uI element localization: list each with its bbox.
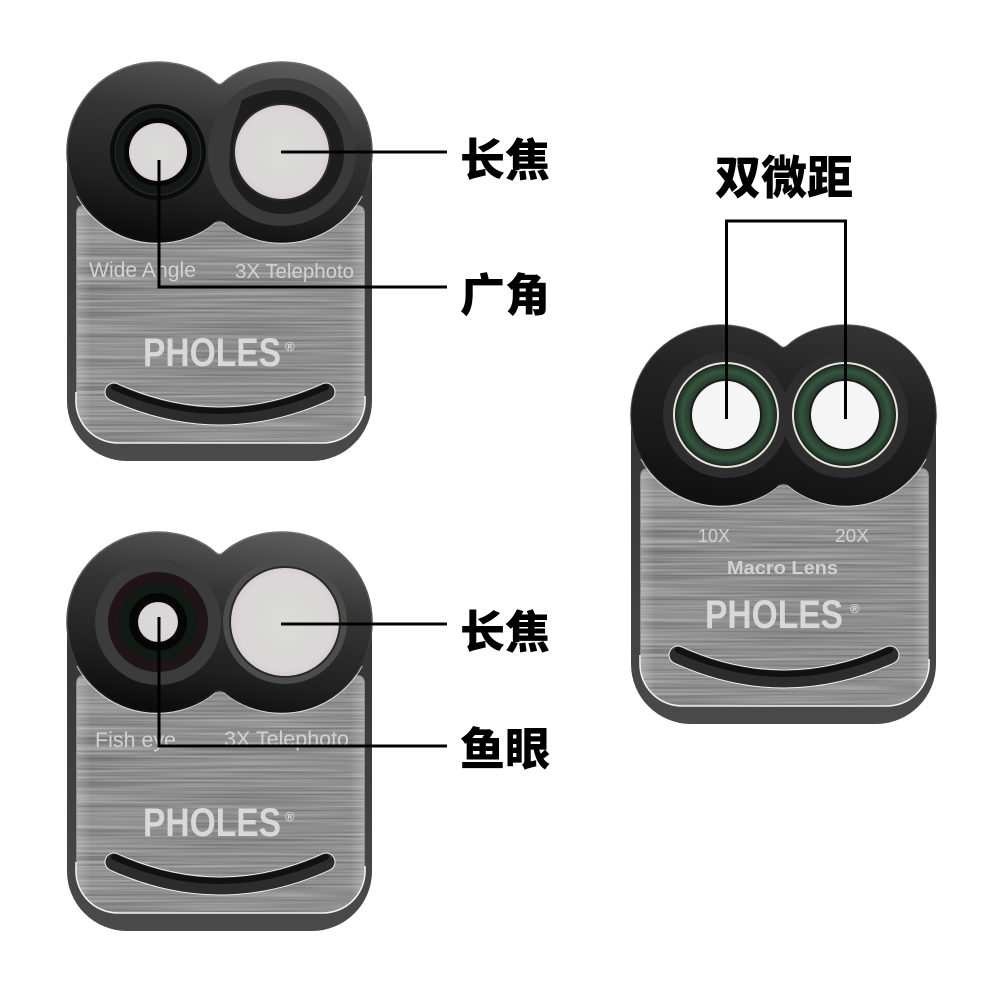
brand logo: ®	[285, 339, 295, 354]
label: fisheye: 鱼眼	[460, 724, 550, 775]
leader line: wide angle	[159, 160, 447, 287]
right telephoto lens	[223, 560, 347, 684]
brand logo: PHOLES	[705, 593, 843, 637]
20X macro lens	[782, 352, 908, 478]
plate text: macro lens: Macro Lens	[727, 558, 838, 578]
leader line: fisheye	[159, 617, 447, 746]
10X macro lens	[663, 352, 789, 478]
label: wide angle: 广角	[460, 270, 550, 321]
leader line: telephoto bottom	[281, 622, 447, 626]
leader bracket: dual macro	[726, 221, 846, 419]
left wide angle lens	[110, 104, 206, 200]
brand logo: ®	[285, 809, 295, 824]
plate text: fish eye: Fish eye	[95, 729, 176, 752]
label: telephoto bottom: 长焦	[460, 607, 550, 658]
device: dual macro lens clip	[629, 323, 938, 724]
plate text: wide angle: Wide Angle	[89, 259, 196, 282]
brand logo: ®	[850, 601, 860, 616]
device: fisheye and telephoto lens clip	[65, 530, 374, 931]
brand logo: PHOLES	[143, 801, 281, 845]
label: dual macro: 双微距	[715, 152, 853, 204]
device: wide angle and telephoto lens clip	[65, 60, 374, 461]
darker macro housing	[631, 325, 936, 505]
right telephoto lens	[208, 78, 356, 226]
left fisheye lens	[95, 559, 221, 685]
plate text: 10X: 10X	[698, 526, 730, 546]
leader line: telephoto top	[281, 150, 447, 154]
plate text: 3X telephoto: 3X Telephoto	[235, 261, 354, 283]
label: telephoto top: 长焦	[460, 135, 550, 186]
brand logo: PHOLES	[143, 331, 281, 375]
plate text: 3X telephoto: 3X Telephoto	[224, 728, 349, 751]
plate text: 20X: 20X	[835, 526, 869, 546]
